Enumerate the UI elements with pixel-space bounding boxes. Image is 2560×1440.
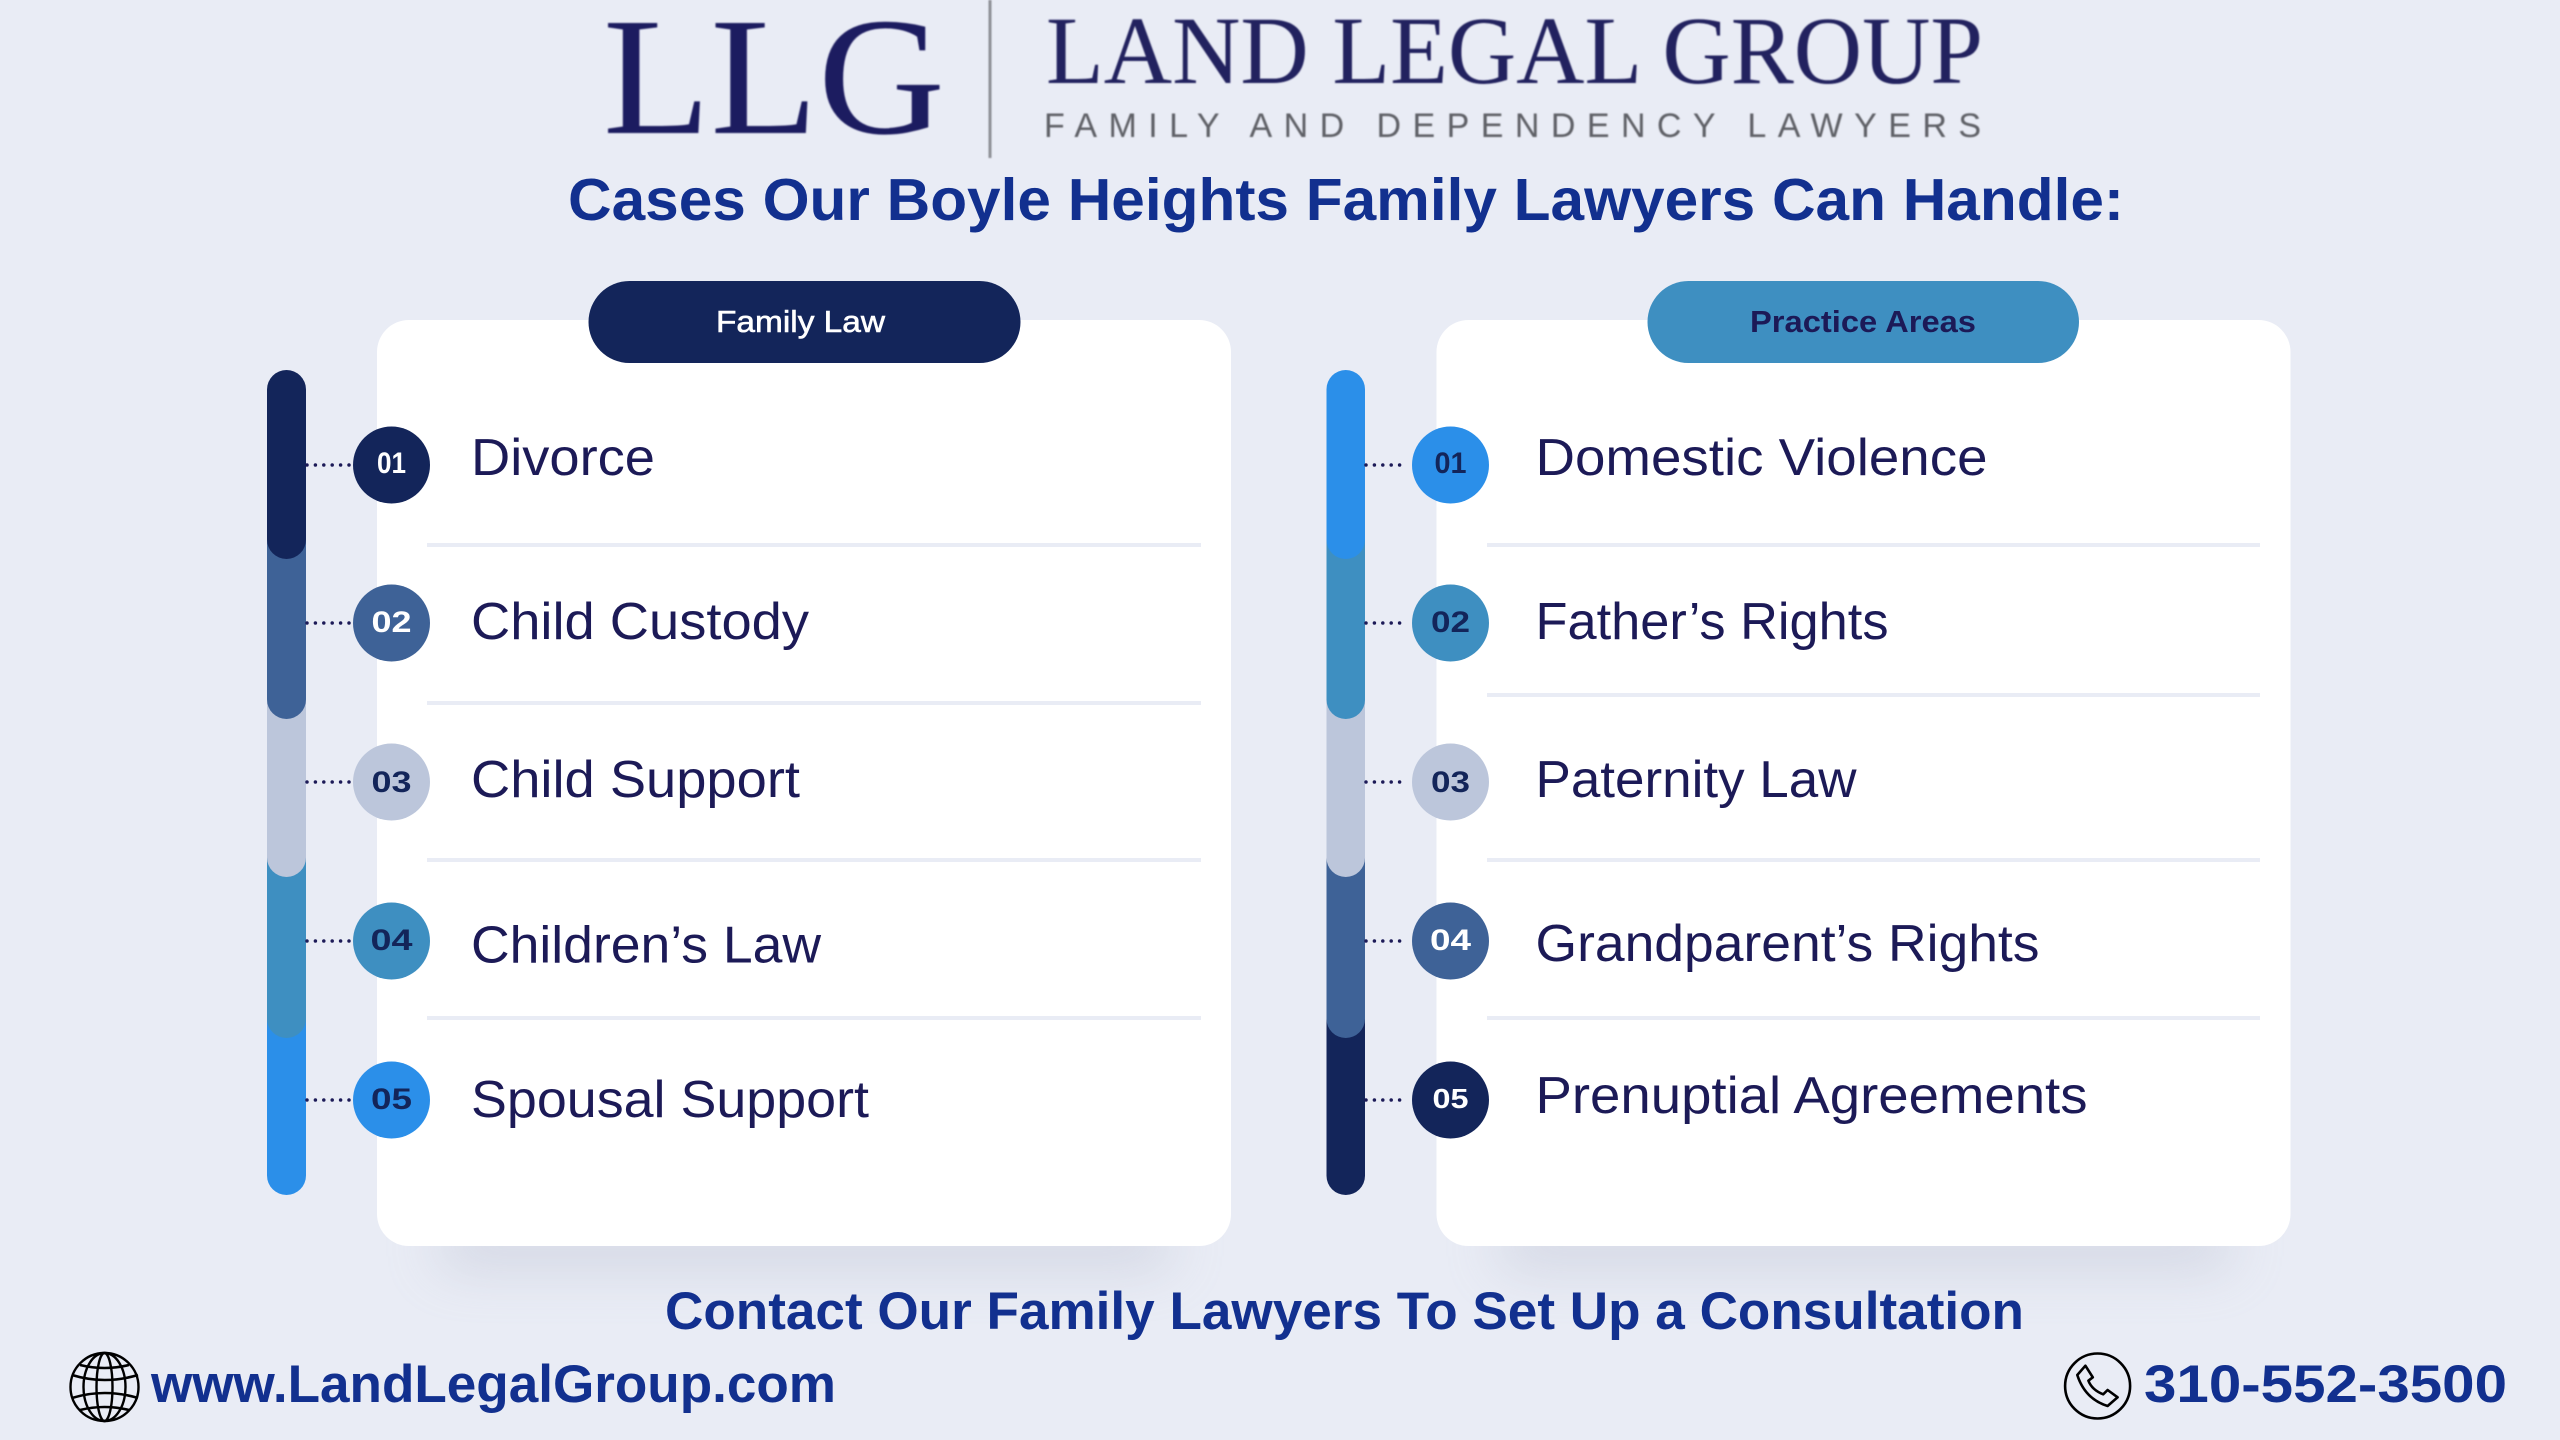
- pill heading: practice areas: [1648, 281, 2079, 363]
- pill heading: practice areas: Practice Areas: [1750, 304, 1976, 339]
- segmented timeline bar: [267, 370, 306, 1195]
- item 02 Father's Rights: [1366, 584, 1888, 662]
- item 05 Spousal Support: [307, 1062, 870, 1138]
- item 05 Prenuptial Agreements: 05: [1432, 1083, 1468, 1114]
- item 03 Paternity Law: 03: [1431, 766, 1470, 799]
- item 02 Child Custody: Child Custody: [471, 593, 809, 651]
- item 03 Paternity Law: [1366, 744, 1857, 820]
- item 04 Grandparent's Rights: 04: [1430, 924, 1471, 957]
- item 02 Child Custody: 02: [372, 606, 412, 639]
- card: family law: [377, 320, 1231, 1246]
- item 04 Children's Law: [307, 902, 821, 980]
- item 04 Grandparent's Rights: [1366, 902, 2040, 980]
- panel: family law: [267, 281, 1231, 1246]
- item 03 Paternity Law: Paternity Law: [1536, 751, 1857, 809]
- row dividers: [1487, 543, 2260, 1020]
- item 04 Grandparent's Rights: Grandparent’s Rights: [1536, 915, 2040, 973]
- phone number: 310-552-3500: [2144, 1355, 2507, 1414]
- item 02 Child Custody: [307, 584, 809, 662]
- item 02 Father's Rights: 02: [1431, 606, 1470, 639]
- item 01 Divorce: 01: [377, 447, 406, 480]
- item 03 Child Support: [307, 744, 801, 820]
- item 04 Children's Law: Children’s Law: [471, 916, 821, 974]
- item 01 Divorce: Divorce: [471, 429, 655, 487]
- icon: globe: [70, 1353, 138, 1421]
- website address: www.LandLegalGroup.com: [150, 1355, 836, 1414]
- item 05 Prenuptial Agreements: Prenuptial Agreements: [1536, 1067, 2088, 1125]
- logo divider: [988, 0, 992, 158]
- title: Cases Our Boyle Heights Family Lawyers Can Handle:: [568, 167, 2124, 233]
- logo: Land Legal Group: [603, 0, 1983, 170]
- card: practice areas: [1436, 320, 2290, 1246]
- item 05 Spousal Support: 05: [371, 1083, 412, 1116]
- segmented timeline bar: [1326, 370, 1365, 1195]
- item 05 Spousal Support: Spousal Support: [471, 1071, 870, 1129]
- panel: practice areas: [1326, 281, 2290, 1246]
- logo tagline: FAMILY AND DEPENDENCY LAWYERS: [1044, 107, 1981, 145]
- call to action heading: Contact Our Family Lawyers To Set Up a Consultation: [665, 1282, 2024, 1341]
- icon: phone: [2065, 1354, 2130, 1418]
- item 03 Child Support: 03: [372, 766, 412, 799]
- item 02 Father's Rights: Father’s Rights: [1536, 593, 1888, 651]
- item 01 Divorce: [307, 426, 655, 504]
- logo firm name: LAND LEGAL GROUP: [1046, 0, 1983, 104]
- item 04 Children's Law: 04: [370, 924, 413, 957]
- pill heading: family law: Family Law: [716, 304, 886, 339]
- pill heading: family law: [588, 281, 1020, 363]
- item 01 Domestic Violence: Domestic Violence: [1536, 429, 1988, 487]
- item 01 Domestic Violence: 01: [1434, 447, 1466, 480]
- row dividers: [427, 543, 1201, 1020]
- card shadows: [440, 1225, 2230, 1265]
- item 01 Domestic Violence: [1366, 426, 1988, 504]
- item 05 Prenuptial Agreements: [1366, 1062, 2088, 1138]
- item 03 Child Support: Child Support: [471, 751, 801, 809]
